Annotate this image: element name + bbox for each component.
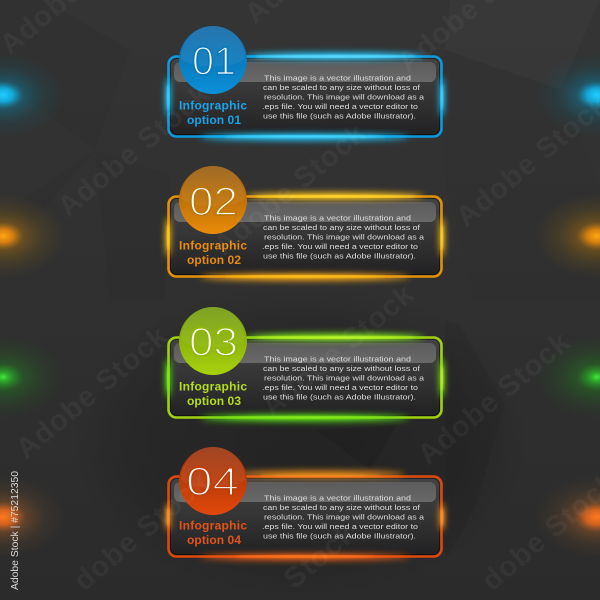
- description text: resolution. This image will download as a: [264, 92, 425, 102]
- description text: can be scaled to any size without loss of: [263, 503, 421, 512]
- description text: can be scaled to any size without loss of: [263, 83, 421, 92]
- number badge 01: [179, 26, 247, 94]
- description text: .eps file. You will need a vector editor to: [262, 383, 418, 392]
- panel box: [166, 471, 444, 560]
- option label: option 01: [187, 113, 241, 127]
- description text: resolution. This image will download as a: [264, 374, 425, 382]
- watermarks: Adobe Stock: [10, 320, 175, 465]
- panel: option 02: [166, 166, 444, 280]
- option label: Infographic: [179, 518, 247, 532]
- number badge 03: [179, 307, 247, 375]
- panel: option 04: [166, 447, 444, 560]
- description text: [262, 494, 425, 540]
- option label: Infographic: [179, 238, 247, 252]
- description text: This image is a vector illustration and: [264, 494, 411, 502]
- description text: use this file (such as Adobe Illustrator).: [263, 392, 416, 402]
- panel box: [166, 334, 444, 422]
- description text: .eps file. You will need a vector editor to: [262, 102, 418, 111]
- watermarks: Adobe Stock: [412, 326, 577, 471]
- number badge 01: 01: [192, 39, 236, 83]
- description text: This image is a vector illustration and: [264, 214, 411, 222]
- watermarks: dobe Stock: [68, 466, 216, 597]
- panel: option 01: [166, 26, 444, 140]
- side glow: green right: [535, 335, 600, 419]
- description text: resolution. This image will download as a: [264, 512, 425, 522]
- number badge 02: [179, 166, 247, 234]
- option label: [179, 238, 247, 267]
- option label: [179, 518, 247, 547]
- watermarks: Stock: [278, 517, 363, 595]
- panel box: [166, 52, 444, 140]
- side glow: blue right: [535, 53, 600, 137]
- description text: use this file (such as Adobe Illustrator).: [263, 112, 416, 120]
- stock credit: Adobe Stock | #75212350: [9, 471, 21, 590]
- option label: option 02: [187, 253, 241, 267]
- description text: can be scaled to any size without loss of: [263, 223, 421, 232]
- option label: [179, 98, 247, 127]
- number badge 03: 03: [189, 320, 238, 364]
- number badge 04: [179, 447, 247, 515]
- watermarks: Adobe Stock: [256, 278, 421, 423]
- option label: Infographic: [179, 380, 247, 394]
- description text: use this file (such as Adobe Illustrator).: [263, 252, 416, 260]
- side glow: blue left: [0, 53, 65, 137]
- description text: [262, 214, 425, 260]
- description text: can be scaled to any size without loss of: [263, 364, 421, 373]
- description text: resolution. This image will download as a: [264, 232, 425, 242]
- description text: .eps file. You will need a vector editor to: [262, 242, 418, 251]
- description text: [262, 74, 425, 120]
- description text: This image is a vector illustration and: [264, 354, 411, 364]
- option label: option 03: [187, 394, 241, 408]
- description text: This image is a vector illustration and: [264, 74, 411, 82]
- description text: .eps file. You will need a vector editor to: [262, 522, 418, 531]
- side glow: red-orange left: [0, 475, 65, 559]
- side glow: orange right: [535, 194, 600, 278]
- option label: [179, 380, 247, 408]
- option label: option 04: [187, 533, 241, 547]
- watermarks: Adobe Stock: [52, 78, 217, 223]
- side glow: red-orange right: [535, 475, 600, 559]
- side glow: orange left: [0, 194, 65, 278]
- watermarks: Adobe Stock: [208, 117, 373, 262]
- panel box: [166, 192, 444, 280]
- panel: option 03: [166, 307, 444, 422]
- side glow: green left: [0, 335, 65, 419]
- number badge 02: 02: [189, 180, 238, 224]
- option label: Infographic: [179, 98, 247, 112]
- description text: use this file (such as Adobe Illustrator).: [263, 532, 416, 540]
- number badge 04: 04: [186, 460, 239, 504]
- description text: [262, 354, 425, 402]
